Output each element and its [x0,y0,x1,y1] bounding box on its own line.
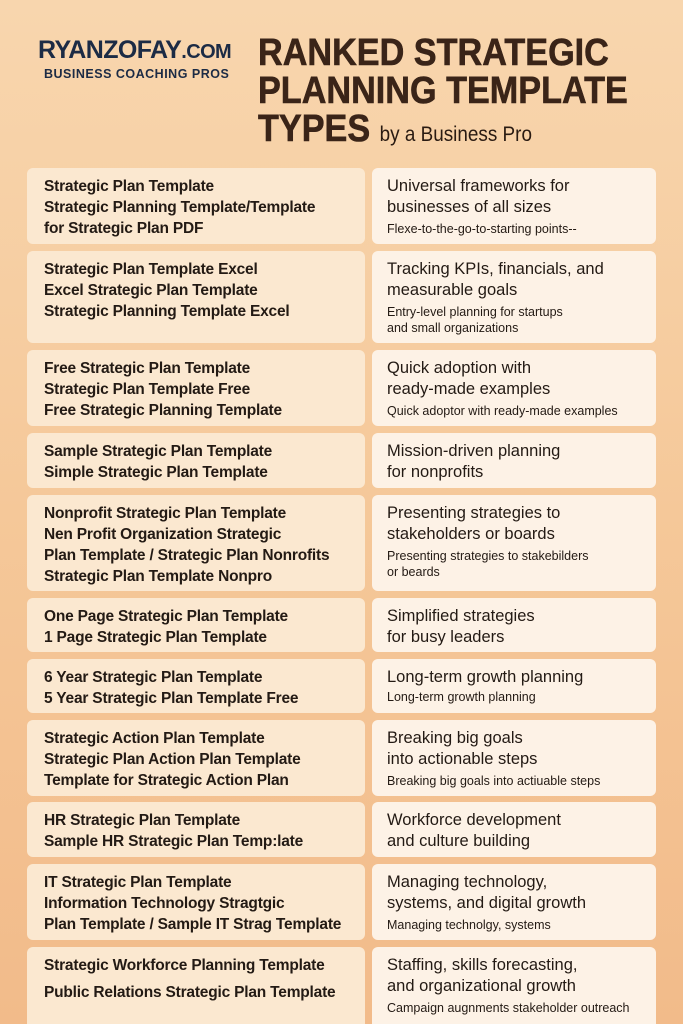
row 6: 1 Page Strategic Plan Template [44,629,267,646]
text: Presenting strategies to stakebilders [387,549,588,563]
row 4 [27,433,365,488]
text: Long-term growth planning [387,690,536,704]
text: Simplified strategies [387,607,535,625]
row 10: Plan Template / Sample IT Strag Template [44,916,341,933]
text: or beards [387,565,440,579]
row 6 [27,598,365,652]
row 10: IT Strategic Plan Template [44,874,231,891]
text: Long-term growth planning [387,668,583,686]
text: Flexe-to-the-go-to-starting points-- [387,222,577,236]
text: stakeholders or boards [387,525,555,543]
row 1: Strategic Planning Template/Template [44,199,315,216]
text: Entry-level planning for startups [387,305,563,319]
text: Quick adoptor with ready-made examples [387,404,618,418]
row 8: Strategic Action Plan Template [44,730,265,747]
row 2: Excel Strategic Plan Template [44,282,258,299]
text: Breaking big goals [387,729,523,747]
row 2: Strategic Plan Template Excel [44,261,258,278]
row 11 [27,947,365,1024]
row 5: Strategic Plan Template Nonpro [44,568,272,585]
text: businesses of all sizes [387,198,551,216]
row 11: Strategic Workforce Planning Template [44,957,325,974]
row 4: Sample Strategic Plan Template [44,443,272,460]
row 5: Nonprofit Strategic Plan Template [44,505,286,522]
row 2: Strategic Planning Template Excel [44,303,290,320]
row 7 [27,659,365,713]
text: Presenting strategies to [387,504,560,522]
row 5: Plan Template / Strategic Plan Nonrofits [44,547,329,564]
title: RANKED STRATEGIC [258,32,609,74]
text: for nonprofits [387,463,483,481]
row 7: 5 Year Strategic Plan Template Free [44,690,298,707]
logo: RYANZOFAY.COM [38,36,231,64]
row 5: Nen Profit Organization Strategic [44,526,281,543]
text: Staffing, skills forecasting, [387,956,577,974]
row 9: HR Strategic Plan Template [44,812,240,829]
text: systems, and digital growth [387,894,586,912]
title [258,32,628,150]
text: Mission-driven planning [387,442,560,460]
row 9: Sample HR Strategic Plan Temp:late [44,833,303,850]
row 1: Strategic Plan Template [44,178,214,195]
title: PLANNING TEMPLATE [258,70,628,112]
text: Managing technology, [387,873,547,891]
row 11: Public Relations Strategic Plan Template [44,984,335,1001]
text: Universal frameworks for [387,177,569,195]
text: and small organizations [387,321,518,335]
row 5 [27,495,365,591]
row 8: Strategic Plan Action Plan Template [44,751,301,768]
row 8 [27,720,365,796]
row 4: Simple Strategic Plan Template [44,464,268,481]
text: Workforce development [387,811,561,829]
text: ready-made examples [387,380,550,398]
row 3: Free Strategic Plan Template [44,360,250,377]
text: measurable goals [387,281,517,299]
row 10: Information Technology Stragtgic [44,895,284,912]
row 3: Free Strategic Planning Template [44,402,282,419]
text: Campaign augnments stakeholder outreach [387,1001,630,1015]
text: Tracking KPIs, financials, and [387,260,604,278]
text: Managing technolgy, systems [387,918,551,932]
row 7: 6 Year Strategic Plan Template [44,669,262,686]
logo: BUSINESS COACHING PROS [44,67,229,81]
text: and organizational growth [387,977,576,995]
row 1 [27,168,365,244]
text: into actionable steps [387,750,537,768]
text: and culture building [387,832,530,850]
row 3 [27,350,365,426]
row 2 [27,251,365,343]
row 1: for Strategic Plan PDF [44,220,203,237]
text: Breaking big goals into actiuable steps [387,774,600,788]
row 3: Strategic Plan Template Free [44,381,250,398]
text: for busy leaders [387,628,504,646]
title: TYPES by a Business Pro [258,108,532,150]
row 9 [27,802,365,857]
row 10 [27,864,365,940]
text: Quick adoption with [387,359,531,377]
row 8: Template for Strategic Action Plan [44,772,289,789]
logo [38,36,231,81]
row 6: One Page Strategic Plan Template [44,608,288,625]
